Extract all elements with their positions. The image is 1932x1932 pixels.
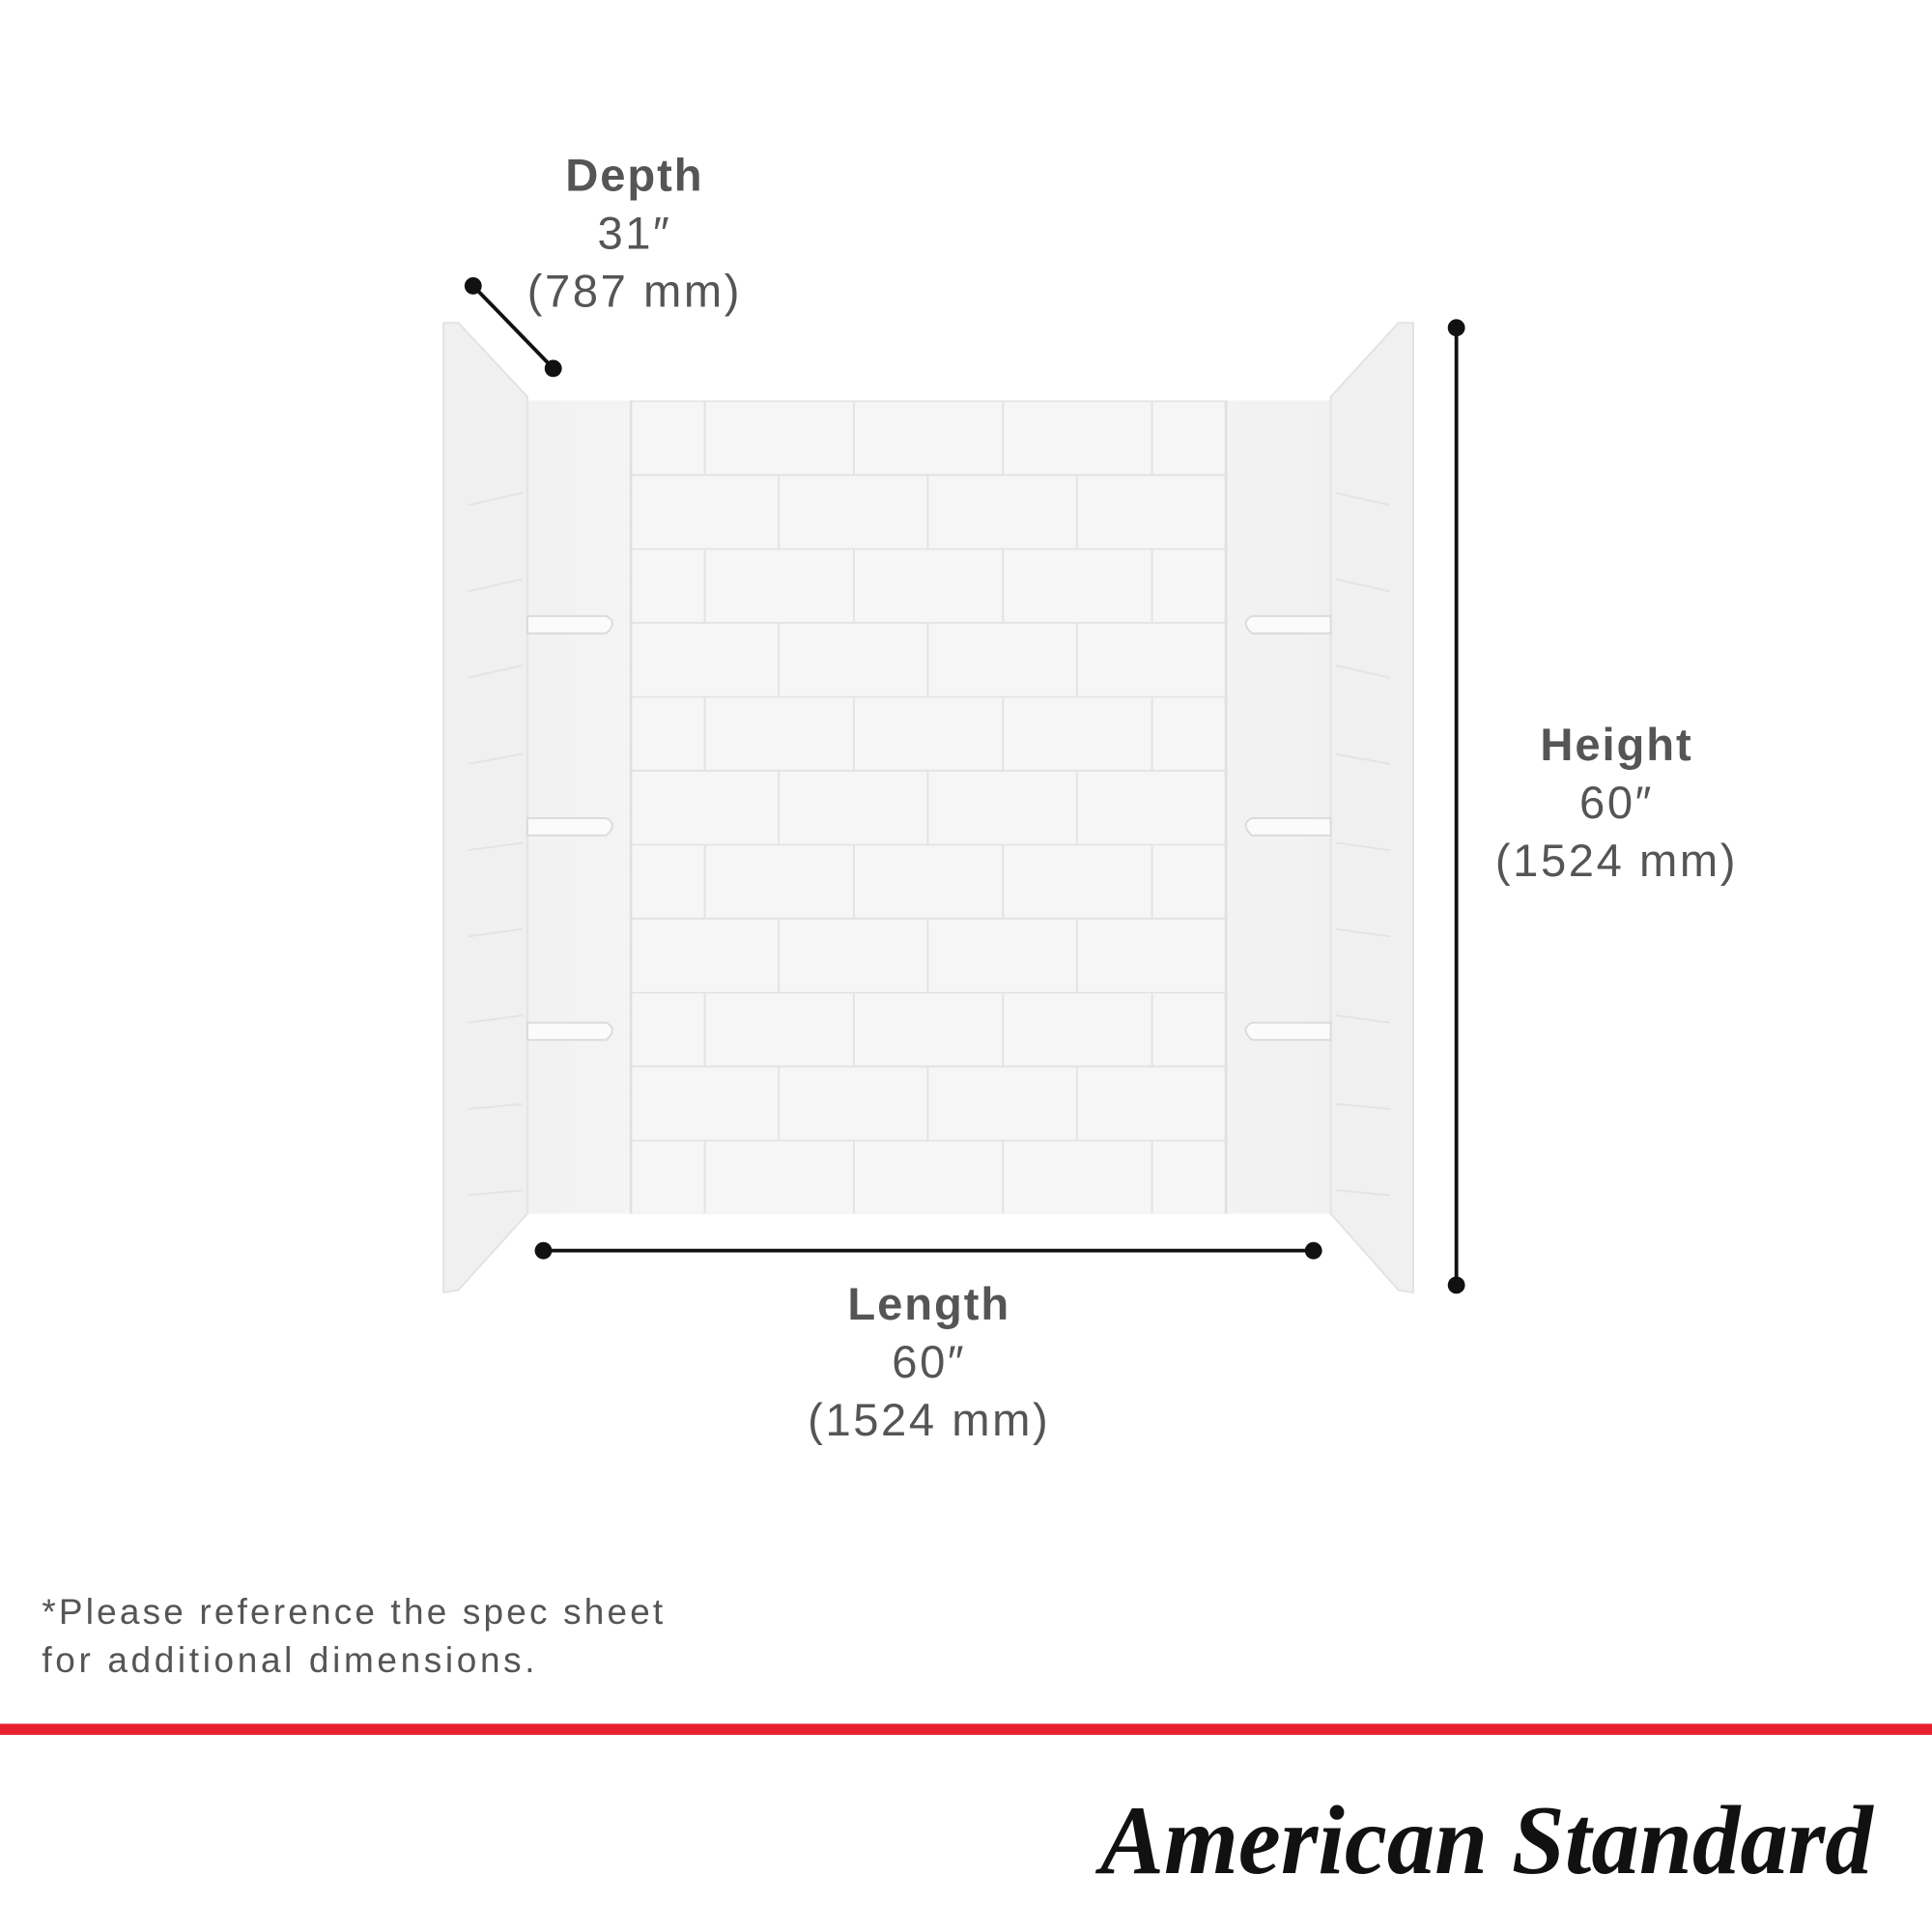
height label: 60″: [1579, 778, 1654, 829]
footnote: for additional dimensions.: [42, 1640, 535, 1680]
length dimension line: [535, 1242, 1322, 1260]
length label: Length: [847, 1279, 1010, 1330]
height label: (1524 mm): [1495, 836, 1738, 887]
shower wall illustration: [443, 323, 1413, 1293]
logo: American Standard: [1094, 1786, 1875, 1895]
back wall: [527, 401, 1331, 1213]
red divider: [0, 1723, 1932, 1735]
footnote: *Please reference the spec sheet: [42, 1592, 663, 1632]
depth label: (787 mm): [527, 267, 742, 318]
height label: [1495, 720, 1738, 887]
length label: 60″: [892, 1337, 966, 1388]
height label: Height: [1540, 720, 1693, 771]
depth dimension line: [465, 277, 562, 377]
shelves: [527, 616, 1331, 1040]
right side wall: [1331, 323, 1413, 1293]
height dimension line: [1448, 319, 1465, 1293]
length label: (1524 mm): [808, 1395, 1050, 1446]
depth label: Depth: [565, 151, 704, 202]
length label: [808, 1279, 1050, 1446]
footnote: [42, 1592, 663, 1680]
depth label: [527, 151, 742, 318]
depth label: 31″: [597, 209, 671, 260]
left side wall: [443, 323, 527, 1293]
